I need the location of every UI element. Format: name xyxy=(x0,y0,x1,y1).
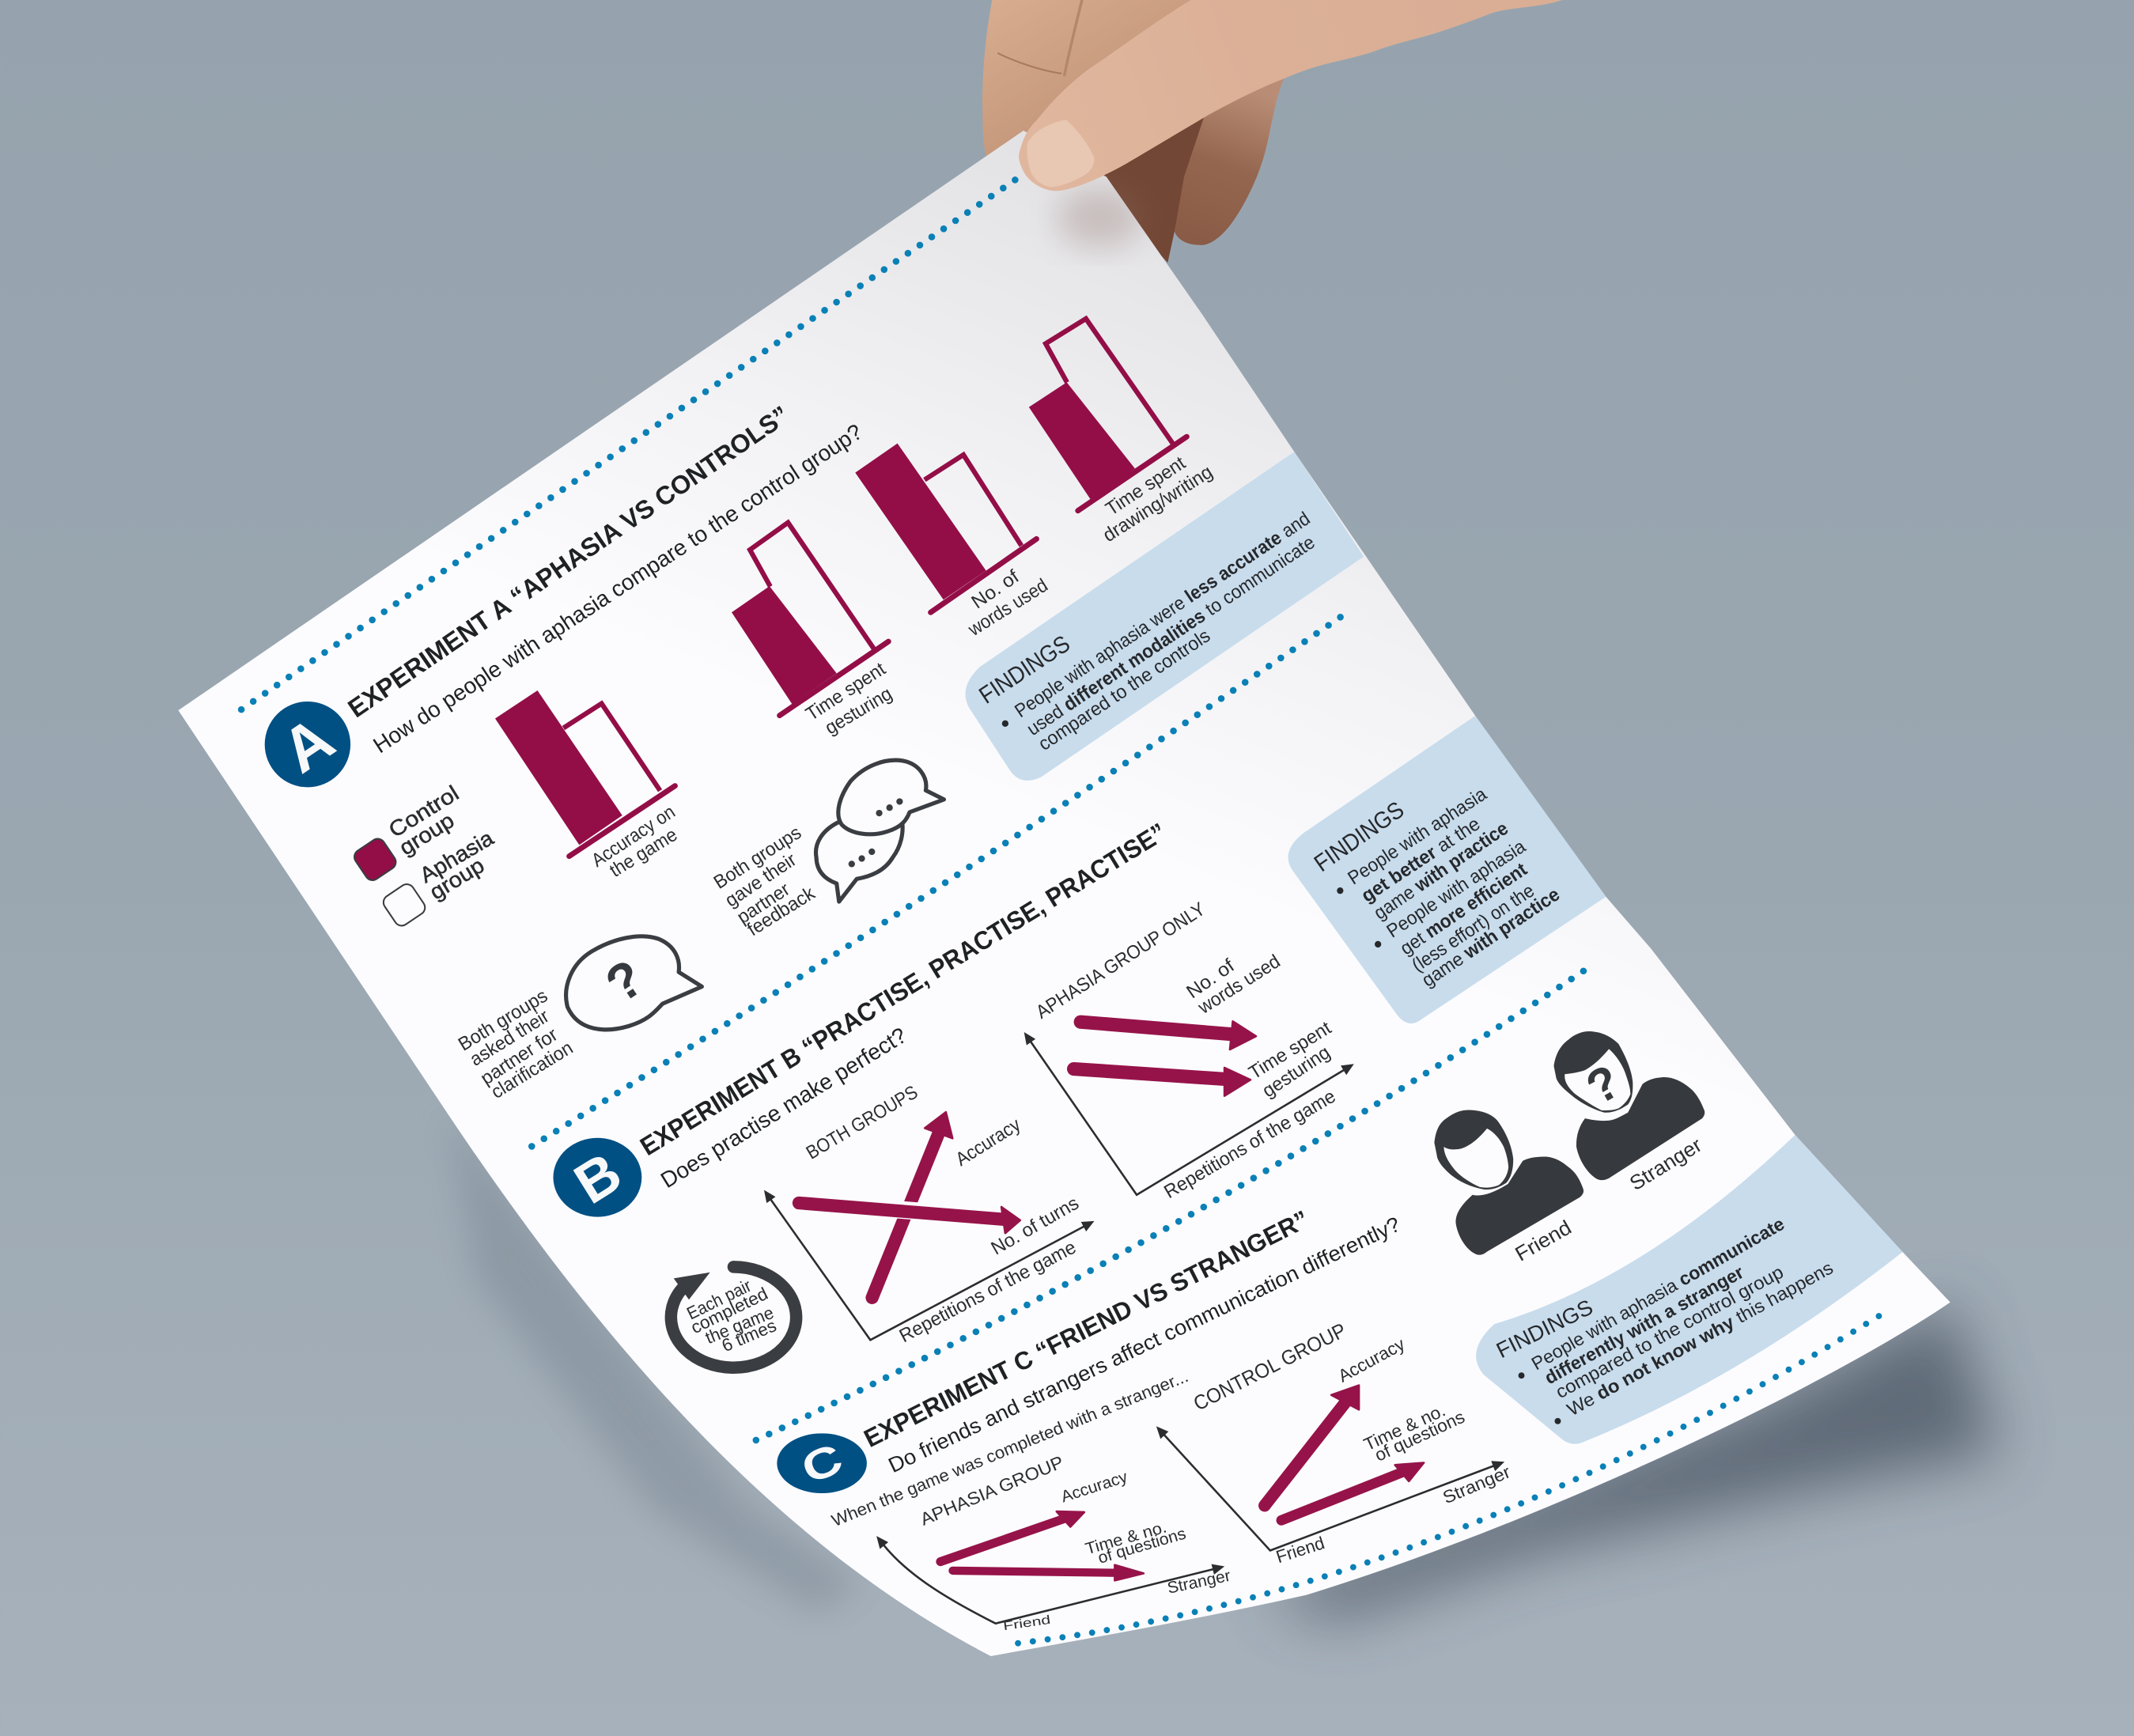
bar chart: time spent drawing/writing: Time spent xyxy=(1102,452,1190,520)
findings A: used different modalities to communicate xyxy=(1023,531,1319,740)
paper sheet xyxy=(178,130,1950,1656)
chart: aphasia group: APHASIA GROUP xyxy=(918,1452,1066,1530)
icon: stranger: ? xyxy=(1577,1053,1629,1115)
bar chart: time spent drawing/writing: drawing/writing xyxy=(1099,461,1216,547)
icon: repeat cycle with text: completed xyxy=(687,1284,771,1337)
text: partner feedback: partner xyxy=(733,879,793,929)
chart: control group: of questions xyxy=(1372,1407,1468,1466)
findings A: People with aphasia were less accurate and xyxy=(1011,508,1314,722)
findings C: differently with a stranger xyxy=(1541,1261,1747,1388)
chart: aphasia group: of questions xyxy=(1095,1525,1188,1568)
chart: aphasia group: Accuracy xyxy=(1059,1468,1130,1506)
icon: friend: Friend xyxy=(1512,1216,1576,1266)
text: clarification: partner for xyxy=(477,1024,562,1090)
text: clarification: asked their xyxy=(466,1005,553,1071)
legend: group xyxy=(426,853,488,904)
legend xyxy=(351,781,498,929)
legend: Control xyxy=(384,781,463,842)
bar chart: time spent gesturing: gesturing xyxy=(822,683,896,739)
chart: both groups xyxy=(770,1081,1084,1347)
text: partner feedback: feedback xyxy=(743,883,819,940)
paper shadow left xyxy=(449,1116,861,1613)
findings B: game with practice xyxy=(1370,818,1512,924)
heading B: EXPERIMENT B “PRACTISE, PRACTISE, PRACTISE” xyxy=(635,817,1171,1161)
panel: experiment B xyxy=(532,616,1606,1367)
dotted divider bottom xyxy=(1018,1313,1883,1643)
question C: Do friends and strangers affect communication differently? xyxy=(884,1212,1404,1477)
icon: repeat cycle with text: 6 times xyxy=(719,1315,779,1356)
icon: feedback speech bubbles xyxy=(816,760,944,902)
hand: thumb and nail xyxy=(1019,0,1562,191)
bar chart: time spent gesturing xyxy=(732,523,896,739)
back fingers xyxy=(982,0,1225,161)
legend: group xyxy=(395,807,458,860)
chart: both groups: No. of turns xyxy=(988,1193,1083,1259)
chart: control group: Time & no. xyxy=(1360,1400,1448,1454)
text: partner feedback: gave their xyxy=(721,849,800,911)
heading A: EXPERIMENT A “APHASIA VS CONTROLS” xyxy=(342,400,794,723)
thumb shadow on paper xyxy=(1056,187,1143,248)
chart: control group xyxy=(1163,1319,1514,1567)
icon: stranger: Stranger xyxy=(1626,1134,1706,1195)
findings B: FINDINGS xyxy=(1310,796,1409,877)
text: partner feedback xyxy=(710,822,819,940)
chart: both groups: Accuracy xyxy=(952,1114,1024,1171)
bar chart: accuracy on the game: the game xyxy=(606,824,681,882)
findings C: We do not know why this happens xyxy=(1564,1258,1837,1420)
dotted divider A/B xyxy=(532,616,1342,1146)
bar chart: time spent drawing/writing xyxy=(1029,319,1216,547)
chart: both groups: Repetitions of the game xyxy=(896,1237,1080,1347)
chart: aphasia group only: words used xyxy=(1194,951,1284,1019)
legend: Aphasia xyxy=(415,825,498,887)
badge C: C xyxy=(795,1435,849,1493)
findings C: FINDINGS xyxy=(1493,1295,1597,1363)
chart: aphasia group only: No. of xyxy=(1182,955,1239,1003)
text: partner feedback: Both groups xyxy=(710,822,805,894)
dotted divider B/C xyxy=(756,964,1594,1440)
chart: control group: Friend xyxy=(1273,1533,1327,1567)
badge C xyxy=(777,1433,867,1493)
text: clarification xyxy=(455,985,577,1103)
findings B: People with aphasia xyxy=(1344,783,1491,889)
chart: aphasia group xyxy=(883,1452,1232,1633)
chart: control group: Accuracy xyxy=(1335,1333,1409,1386)
chart: aphasia group only: Time spent xyxy=(1245,1017,1335,1084)
chart: aphasia group: Stranger xyxy=(1166,1567,1232,1598)
icon: repeat cycle with text xyxy=(671,1267,796,1367)
findings C xyxy=(1476,1135,1902,1444)
dark finger behind paper xyxy=(1075,115,1205,263)
findings B: (less effort) on the xyxy=(1408,880,1538,977)
icon: repeat cycle with text: Each pair xyxy=(683,1275,755,1323)
findings C: compared to the control group xyxy=(1552,1261,1787,1402)
text: clarification: clarification xyxy=(487,1037,577,1103)
findings B: People with aphasia xyxy=(1383,836,1530,942)
chart: aphasia group only: gesturing xyxy=(1258,1042,1334,1102)
bar chart: accuracy on the game: Accuracy on xyxy=(588,801,679,872)
icon: friend xyxy=(1434,1110,1583,1266)
dotted divider top xyxy=(241,174,1023,709)
question B: Does practise make perfect? xyxy=(656,1023,911,1193)
text: clarification: Both groups xyxy=(455,985,551,1055)
chart: control group: Stranger xyxy=(1440,1462,1514,1507)
bar chart: number of words used xyxy=(855,444,1052,641)
badge B: B xyxy=(564,1140,633,1216)
badge A: A xyxy=(269,702,346,786)
question A: How do people with aphasia compare to the control group? xyxy=(369,419,867,758)
findings B xyxy=(1288,716,1606,1023)
chart: aphasia group: Friend xyxy=(1002,1613,1051,1633)
bar chart: time spent gesturing: Time spent xyxy=(802,658,890,725)
findings C: People with aphasia communicate xyxy=(1528,1213,1788,1374)
bar chart: number of words used: No. of xyxy=(967,565,1023,613)
chart: both groups: BOTH GROUPS xyxy=(803,1081,921,1163)
chart: aphasia group only: Repetitions of the game xyxy=(1160,1086,1339,1203)
bar chart: accuracy on the game xyxy=(495,690,681,882)
findings B: get more efficient xyxy=(1396,859,1531,959)
chart: aphasia group only xyxy=(1031,898,1345,1203)
findings A: FINDINGS xyxy=(974,630,1075,709)
lower finger xyxy=(1175,76,1285,245)
panel: experiment C xyxy=(756,964,1902,1643)
panel: experiment A xyxy=(241,174,1364,1103)
bar chart: number of words used: words used xyxy=(964,575,1052,641)
chart: aphasia group only: APHASIA GROUP ONLY xyxy=(1032,898,1209,1023)
findings A xyxy=(966,452,1364,781)
icon: question speech bubble xyxy=(566,936,702,1030)
icon: repeat cycle with text: the game xyxy=(702,1303,777,1348)
chart: control group: CONTROL GROUP xyxy=(1190,1319,1350,1416)
findings B: get better at the xyxy=(1357,813,1484,907)
findings A: compared to the controls xyxy=(1035,625,1214,755)
icon: question speech bubble: ? xyxy=(596,948,654,1014)
icon: stranger xyxy=(1553,1031,1706,1195)
findings B: game with practice xyxy=(1418,883,1564,991)
chart: aphasia group: Time & no. xyxy=(1084,1518,1168,1558)
paper drop shadow right xyxy=(1266,1303,2000,1620)
sub-question C: When the game was completed with a stranger... xyxy=(829,1367,1191,1530)
heading C: EXPERIMENT C “FRIEND VS STRANGER” xyxy=(859,1205,1313,1453)
